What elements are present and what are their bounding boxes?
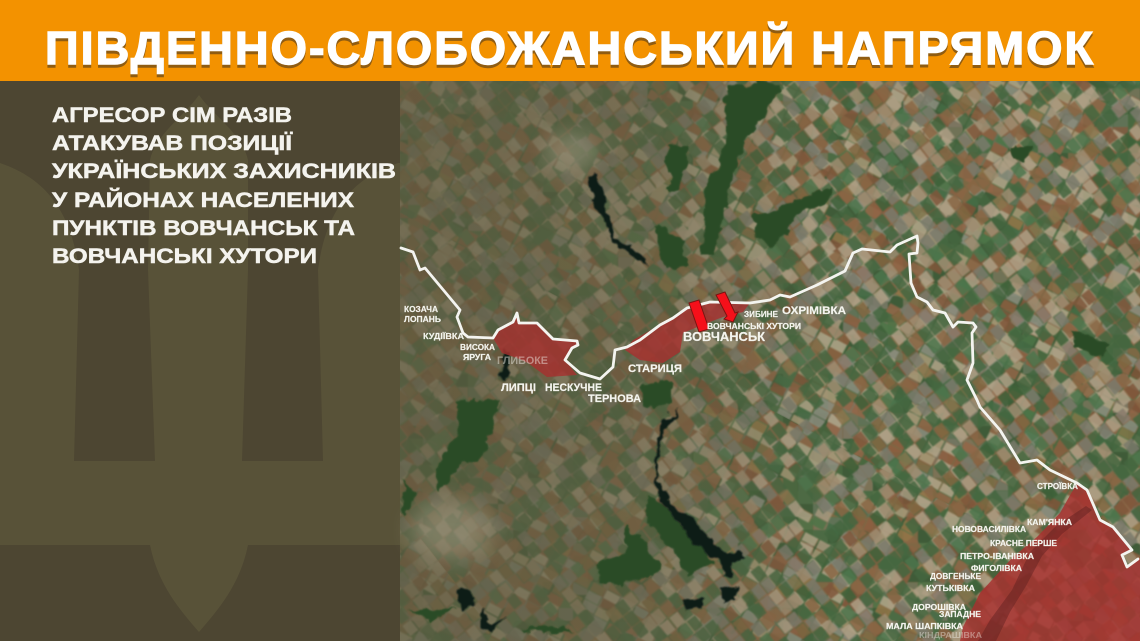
map labels: НЕСКУЧНЕ xyxy=(545,382,602,394)
text block: description: УКРАЇНСЬКИХ ЗАХИСНИКІВ xyxy=(52,160,396,183)
panel: satellite map xyxy=(400,81,1140,641)
occupied area: Hlyboke xyxy=(493,313,578,377)
panel: left text panel xyxy=(0,81,400,641)
map labels: КРАСНЕ ПЕРШЕ xyxy=(990,538,1057,548)
border line xyxy=(401,236,1138,567)
map labels: ВОВЧАНСЬКІ ХУТОРИ xyxy=(707,321,801,331)
map labels: ОХРІМІВКА xyxy=(782,305,846,317)
text block: description xyxy=(52,104,396,268)
map labels: КУДІЇВКА xyxy=(423,331,464,341)
river and reservoirs xyxy=(458,170,745,630)
map labels: СТАРИЦЯ xyxy=(628,363,682,375)
map labels: ДОРОШІВКА xyxy=(912,602,966,612)
icon: trident emblem watermark xyxy=(0,95,400,632)
text block: description: АТАКУВАВ ПОЗИЦІЇ xyxy=(52,132,293,155)
map labels: ТЕРНОВА xyxy=(588,393,641,405)
map labels xyxy=(404,304,1078,640)
map labels: КУТЬКІВКА xyxy=(926,583,975,593)
map labels: ЛОПАНЬ xyxy=(404,314,441,324)
map labels: ЛИПЦІ xyxy=(501,382,536,394)
occupied area: southeast xyxy=(960,483,1140,641)
map labels: СТРОЇВКА xyxy=(1037,481,1078,491)
title shadow: ПІВДЕННО-СЛОБОЖАНСЬКИЙ НАПРЯМОК xyxy=(45,25,1095,77)
map labels: ДОВГЕНЬКЕ xyxy=(930,571,981,581)
text block: description: ПУНКТІВ ВОВЧАНСЬК ТА xyxy=(52,217,355,240)
text block: description: ВОВЧАНСЬКІ ХУТОРИ xyxy=(52,245,317,268)
map labels: ВИСОКА xyxy=(460,342,495,352)
arrow: attack west of Vovchansk xyxy=(689,300,709,332)
map labels: КАМ'ЯНКА xyxy=(1027,517,1072,527)
map labels: ВОВЧАНСЬК xyxy=(683,329,765,344)
arrow: attack towards Vovchanski Khutory xyxy=(716,292,738,322)
map labels: ЗАПАДНЕ xyxy=(939,609,981,619)
header banner xyxy=(0,0,1140,81)
map labels: ЯРУГА xyxy=(463,352,491,362)
text block: description: АГРЕСОР СІМ РАЗІВ xyxy=(52,104,292,127)
map labels: МАЛА ШАПКІВКА xyxy=(886,621,963,631)
occupied area: Vovchansk xyxy=(625,302,750,363)
map labels: ПЕТРО-ІВАНІВКА xyxy=(960,551,1034,561)
map labels: КОЗАЧА xyxy=(404,304,438,314)
map labels: ЗИБИНЕ xyxy=(744,309,778,319)
forests xyxy=(404,83,1110,632)
text block: description: У РАЙОНАХ НАСЕЛЕНИХ xyxy=(52,188,354,212)
map labels: НОВОВАСИЛІВКА xyxy=(952,524,1026,534)
title: ПІВДЕННО-СЛОБОЖАНСЬКИЙ НАПРЯМОК xyxy=(45,22,1095,74)
map labels: ФИГОЛІВКА xyxy=(971,563,1022,573)
towns xyxy=(410,132,598,560)
map labels: КІНДРАШІВКА xyxy=(919,631,982,640)
map labels: ГЛИБОКЕ xyxy=(497,355,548,367)
